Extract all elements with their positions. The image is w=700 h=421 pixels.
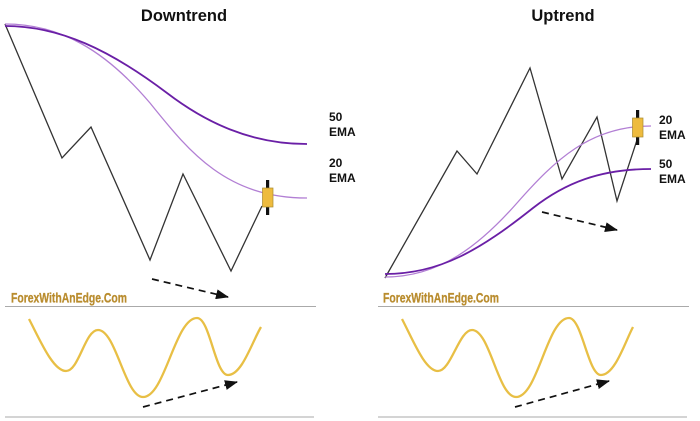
label: 50 EMA: 50 bbox=[329, 110, 343, 124]
panel: uptrend chart bbox=[385, 7, 686, 278]
label: 20 EMA: EMA bbox=[329, 171, 356, 185]
panel: uptrend oscillator bbox=[378, 290, 689, 417]
label: 20 EMA: 20 bbox=[329, 156, 343, 170]
panel: downtrend chart bbox=[5, 7, 356, 297]
oscillator curve bbox=[402, 318, 633, 397]
oscillator curve bbox=[29, 318, 261, 397]
candlestick bbox=[262, 180, 273, 215]
panel: downtrend oscillator bbox=[5, 290, 316, 417]
arrow: oscillator higher lows bbox=[515, 381, 609, 407]
price line bbox=[385, 68, 637, 278]
20 EMA curve bbox=[5, 24, 307, 198]
50 EMA curve bbox=[385, 169, 651, 274]
20 EMA curve bbox=[385, 126, 651, 277]
label: 50 EMA: EMA bbox=[329, 125, 356, 139]
watermark: ForexWithAnEdge.Com bbox=[383, 290, 499, 306]
candlestick bbox=[632, 110, 643, 145]
oscillator frame bottom line bbox=[5, 416, 314, 418]
50 EMA curve bbox=[5, 26, 307, 144]
arrow: oscillator higher lows bbox=[143, 382, 237, 407]
heading: Downtrend: Downtrend bbox=[141, 7, 227, 25]
watermark: ForexWithAnEdge.Com bbox=[11, 290, 127, 306]
heading: Uptrend: Uptrend bbox=[531, 7, 595, 25]
oscillator frame top line bbox=[378, 306, 689, 308]
arrow: price lower lows bbox=[542, 212, 617, 230]
label: 50 EMA: 50 bbox=[659, 157, 673, 171]
label: 20 EMA: 20 bbox=[659, 113, 673, 127]
oscillator frame top line bbox=[5, 306, 316, 308]
label: 50 EMA: EMA bbox=[659, 172, 686, 186]
arrow: price lower lows bbox=[152, 279, 228, 297]
oscillator frame bottom line bbox=[378, 416, 687, 418]
price line bbox=[5, 24, 262, 271]
label: 20 EMA: EMA bbox=[659, 128, 686, 142]
